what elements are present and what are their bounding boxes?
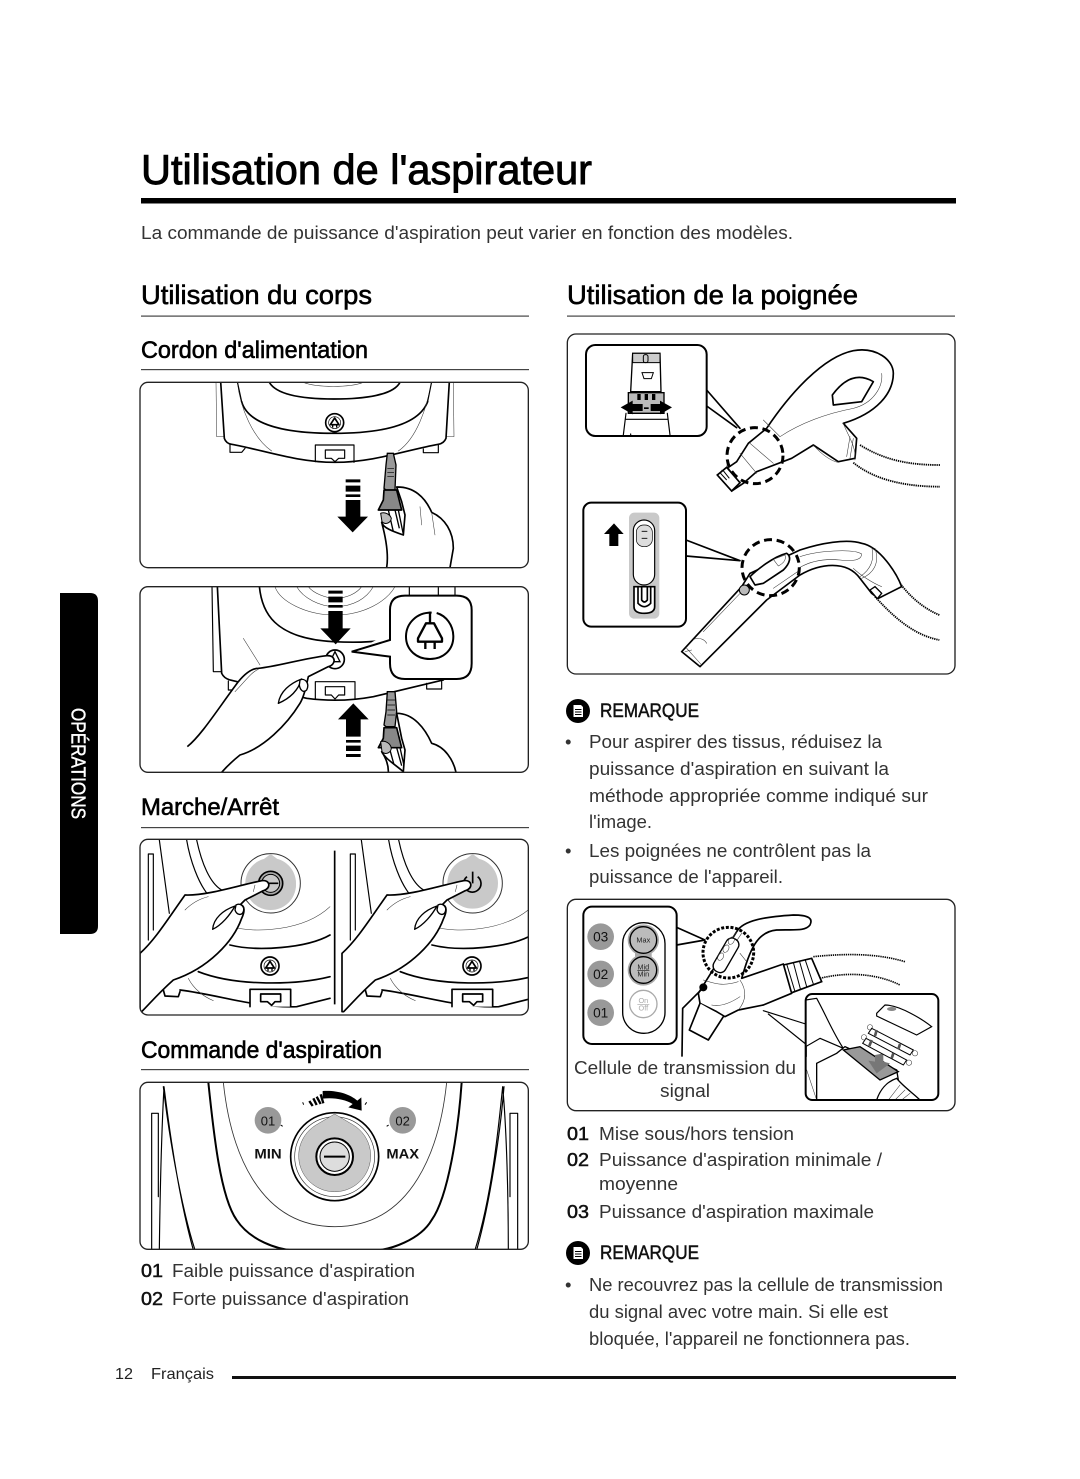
list: handle power levels: Puissance d'aspiration minimale / bbox=[599, 1149, 883, 1170]
panel: using the handle bbox=[567, 334, 955, 674]
panel: suction control dial: 02 bbox=[395, 1113, 410, 1128]
hose 1 bbox=[853, 445, 940, 487]
panel: suction control dial bbox=[140, 1082, 528, 1251]
inset: buttons: Mid bbox=[637, 962, 649, 971]
list: suction levels: 01 bbox=[141, 1260, 163, 1281]
panel: suction control dial: 01 bbox=[261, 1113, 275, 1128]
hose bbox=[813, 955, 905, 985]
subheading: Commande d'aspiration: Commande d'aspiration bbox=[141, 1037, 382, 1064]
inset: buttons bbox=[583, 907, 705, 1044]
list: handle power levels: 02 bbox=[567, 1149, 589, 1170]
inset: buttons: On bbox=[638, 996, 648, 1005]
remarque text 1: méthode appropriée comme indiqué sur bbox=[589, 785, 928, 806]
panel: suction control dial: MAX bbox=[386, 1145, 420, 1161]
handle 2 bbox=[682, 541, 902, 667]
intro text: La commande de puissance d'aspiration peut varier en fonction des modèles. bbox=[141, 222, 793, 243]
remarque text 1: puissance de l'appareil. bbox=[589, 866, 783, 887]
inset: buttons: Min bbox=[637, 970, 649, 979]
footer: Français bbox=[151, 1366, 214, 1383]
panel: press cord rewind button bbox=[140, 586, 528, 772]
label: signal cell: signal bbox=[660, 1080, 710, 1101]
inset 2 bbox=[583, 503, 740, 627]
label: signal cell bbox=[574, 1057, 796, 1101]
hose 2 bbox=[875, 583, 939, 640]
footer bbox=[115, 1366, 956, 1383]
inset 1 bbox=[586, 345, 740, 436]
remarque heading 1: REMARQUE bbox=[600, 701, 699, 722]
inset: buttons: 03 bbox=[593, 930, 608, 945]
panel: on/off button bbox=[140, 839, 532, 1015]
sidebar tab: Opérations: OPÉRATIONS bbox=[66, 708, 90, 819]
dashed circle 2 bbox=[742, 540, 799, 596]
remarque heading 2: REMARQUE bbox=[600, 1243, 699, 1264]
list: handle power levels: Mise sous/hors tension bbox=[599, 1123, 794, 1144]
inset: batteries bbox=[763, 994, 938, 1100]
signal cell leader bbox=[682, 988, 703, 1056]
panel: remote handle bbox=[567, 899, 955, 1111]
dotted circle bbox=[703, 927, 754, 978]
list: suction levels: Forte puissance d'aspiration bbox=[172, 1288, 409, 1309]
list: handle power levels bbox=[567, 1123, 883, 1222]
remarque text 1: • bbox=[565, 731, 571, 752]
inset: buttons: Off bbox=[639, 1004, 649, 1013]
handle illustration bbox=[689, 915, 822, 1040]
heading: Utilisation du corps: Utilisation du corps bbox=[141, 280, 372, 310]
remarque text 1: Les poignées ne contrôlent pas la bbox=[589, 840, 872, 861]
remarque text 1: l'image. bbox=[589, 811, 652, 832]
heading: Utilisation de la poignée: Utilisation de la poignée bbox=[567, 280, 858, 310]
remarque text 1: puissance d'aspiration en suivant la bbox=[589, 758, 890, 779]
subheading: Cordon d'alimentation: Cordon d'alimentation bbox=[141, 337, 368, 364]
inset: buttons: Max bbox=[636, 936, 651, 945]
remarque text 1: • bbox=[565, 840, 571, 861]
subheading: Marche/Arrêt: Marche/Arrêt bbox=[141, 794, 279, 821]
inset: buttons: 02 bbox=[593, 967, 608, 982]
list: handle power levels: Puissance d'aspiration maximale bbox=[599, 1201, 874, 1222]
list: handle power levels: 01 bbox=[567, 1123, 589, 1144]
footer: 12 bbox=[115, 1366, 133, 1383]
remarque text 2: du signal avec votre main. Si elle est bbox=[589, 1301, 888, 1322]
list: suction levels: 02 bbox=[141, 1288, 163, 1309]
panel: pull power cord bbox=[140, 382, 528, 568]
remarque heading 2 bbox=[566, 1241, 699, 1265]
remarque text 2: bloquée, l'appareil ne fonctionnera pas. bbox=[589, 1328, 910, 1349]
panel: suction control dial: MIN bbox=[254, 1145, 282, 1161]
sidebar tab: Opérations bbox=[60, 593, 98, 934]
remarque text 2: • bbox=[565, 1274, 571, 1295]
dashed circle 1 bbox=[727, 428, 783, 484]
list: handle power levels: 03 bbox=[567, 1201, 589, 1222]
remarque text 2: Ne recouvrez pas la cellule de transmission bbox=[589, 1274, 943, 1295]
remarque text 1 bbox=[565, 731, 928, 887]
remarque text 1: Pour aspirer des tissus, réduisez la bbox=[589, 731, 883, 752]
remarque text 2 bbox=[565, 1274, 943, 1349]
remarque heading 1 bbox=[566, 699, 699, 723]
label: signal cell: Cellule de transmission du bbox=[574, 1057, 796, 1078]
list: handle power levels: moyenne bbox=[599, 1173, 678, 1194]
handle 1 bbox=[717, 350, 893, 491]
inset: buttons: 01 bbox=[593, 1006, 608, 1021]
title: Utilisation de l'aspirateur bbox=[141, 146, 592, 193]
list: suction levels bbox=[141, 1260, 415, 1309]
list: suction levels: Faible puissance d'aspiration bbox=[172, 1260, 415, 1281]
